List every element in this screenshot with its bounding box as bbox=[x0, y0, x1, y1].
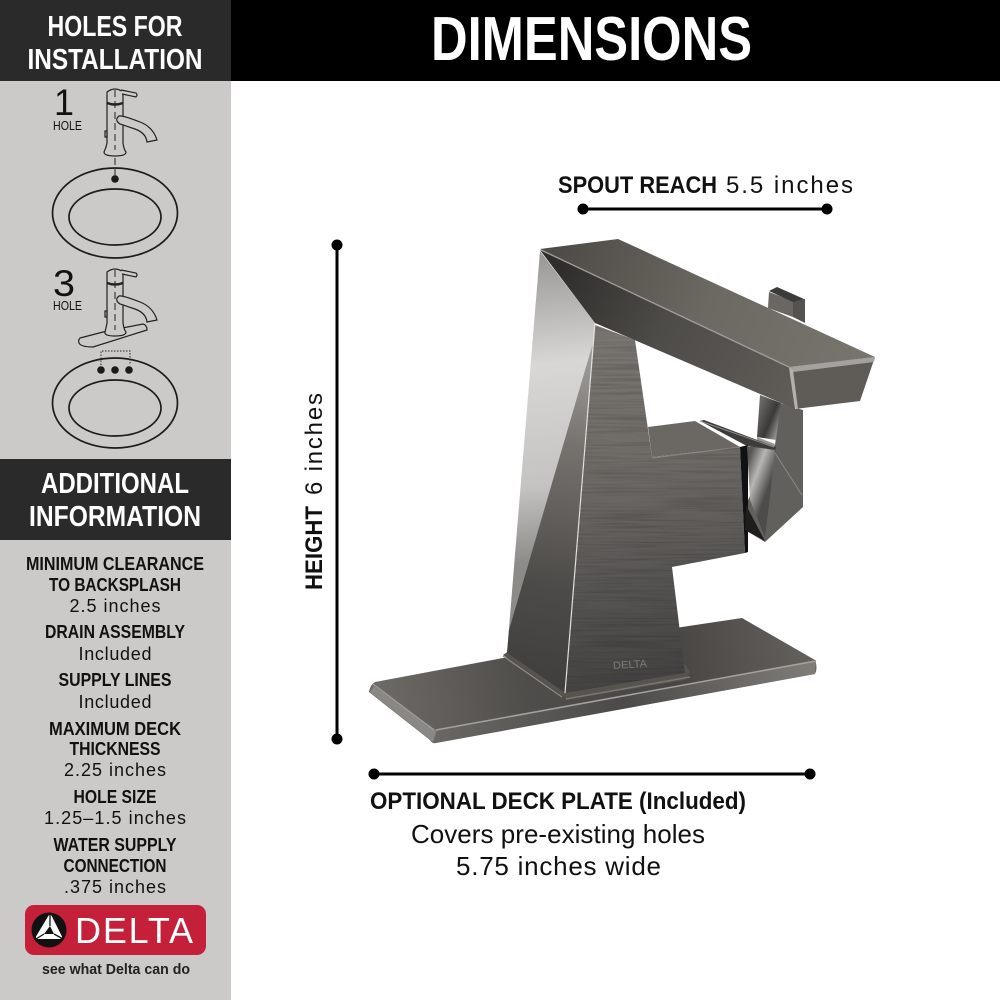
dimension: optional deck plate: 5.75 inches wide bbox=[456, 851, 661, 881]
text block: drain assembly bbox=[45, 622, 185, 664]
text block: minimum clearance bbox=[26, 554, 204, 616]
text block: maximum deck thickness: THICKNESS bbox=[70, 739, 160, 759]
dimension: spout reach: 5.5 inches bbox=[726, 172, 853, 199]
heading band: holes for installation bbox=[0, 0, 231, 81]
text block: minimum clearance: TO BACKSPLASH bbox=[49, 575, 181, 595]
faucet body bbox=[507, 251, 750, 700]
text block: minimum clearance: 2.5 inches bbox=[70, 596, 160, 616]
heading band: additional information: INFORMATION bbox=[29, 501, 201, 533]
delta logo bbox=[25, 905, 206, 978]
dimension: optional deck plate bbox=[368, 768, 816, 881]
heading band: additional information bbox=[0, 459, 231, 540]
text block: drain assembly: DRAIN ASSEMBLY bbox=[45, 622, 185, 642]
handle bbox=[700, 287, 805, 553]
text block: water supply connection: .375 inches bbox=[64, 877, 166, 897]
text block: hole size bbox=[44, 787, 186, 828]
diagram: one hole installation bbox=[52, 82, 178, 258]
diagram: one hole installation: 1 bbox=[54, 82, 74, 123]
text block: supply lines bbox=[58, 670, 172, 712]
spout bbox=[540, 239, 875, 409]
heading band: holes for installation: HOLES FOR bbox=[48, 11, 183, 43]
dimension: spout reach: SPOUT REACH bbox=[558, 172, 717, 199]
text block: supply lines: SUPPLY LINES bbox=[58, 670, 172, 690]
delta logo: DELTA bbox=[75, 910, 193, 951]
delta logo: see what Delta can do bbox=[42, 962, 190, 978]
title band: dimensions bbox=[231, 0, 1000, 81]
text block: drain assembly: Included bbox=[78, 644, 152, 664]
text block: maximum deck thickness bbox=[49, 719, 181, 780]
text block: supply lines: Included bbox=[78, 692, 152, 712]
text block: water supply connection: CONNECTION bbox=[64, 856, 166, 876]
diagram: three hole installation: 3 bbox=[53, 263, 75, 304]
text block: water supply connection: WATER SUPPLY bbox=[54, 835, 176, 855]
text block: water supply connection bbox=[54, 835, 176, 897]
left sidebar panel bbox=[0, 0, 231, 1000]
deck plate bbox=[369, 618, 816, 743]
dimension: height: 6 inches bbox=[301, 393, 328, 495]
diagram: one hole installation: HOLE bbox=[53, 119, 82, 133]
dimension: optional deck plate: Covers pre-existing holes bbox=[411, 819, 705, 849]
text block: maximum deck thickness: MAXIMUM DECK bbox=[49, 719, 181, 739]
diagram: three hole installation: HOLE bbox=[53, 299, 82, 313]
dimension: height: HEIGHT bbox=[301, 506, 328, 590]
text block: minimum clearance: MINIMUM CLEARANCE bbox=[26, 554, 204, 574]
faucet product image bbox=[369, 239, 875, 743]
dimension: height bbox=[301, 240, 342, 744]
diagram: three hole installation bbox=[52, 263, 178, 448]
title band: dimensions: DIMENSIONS bbox=[431, 5, 752, 74]
heading band: additional information: ADDITIONAL bbox=[41, 468, 189, 500]
faucet body: DELTA bbox=[613, 658, 647, 672]
heading band: holes for installation: INSTALLATION bbox=[28, 44, 202, 76]
text block: maximum deck thickness: 2.25 inches bbox=[64, 760, 166, 780]
dimension: optional deck plate: OPTIONAL DECK PLATE (Included) bbox=[370, 788, 746, 815]
text block: hole size: 1.25–1.5 inches bbox=[44, 808, 186, 828]
dimension: spout reach bbox=[558, 172, 853, 214]
text block: hole size: HOLE SIZE bbox=[74, 787, 156, 807]
